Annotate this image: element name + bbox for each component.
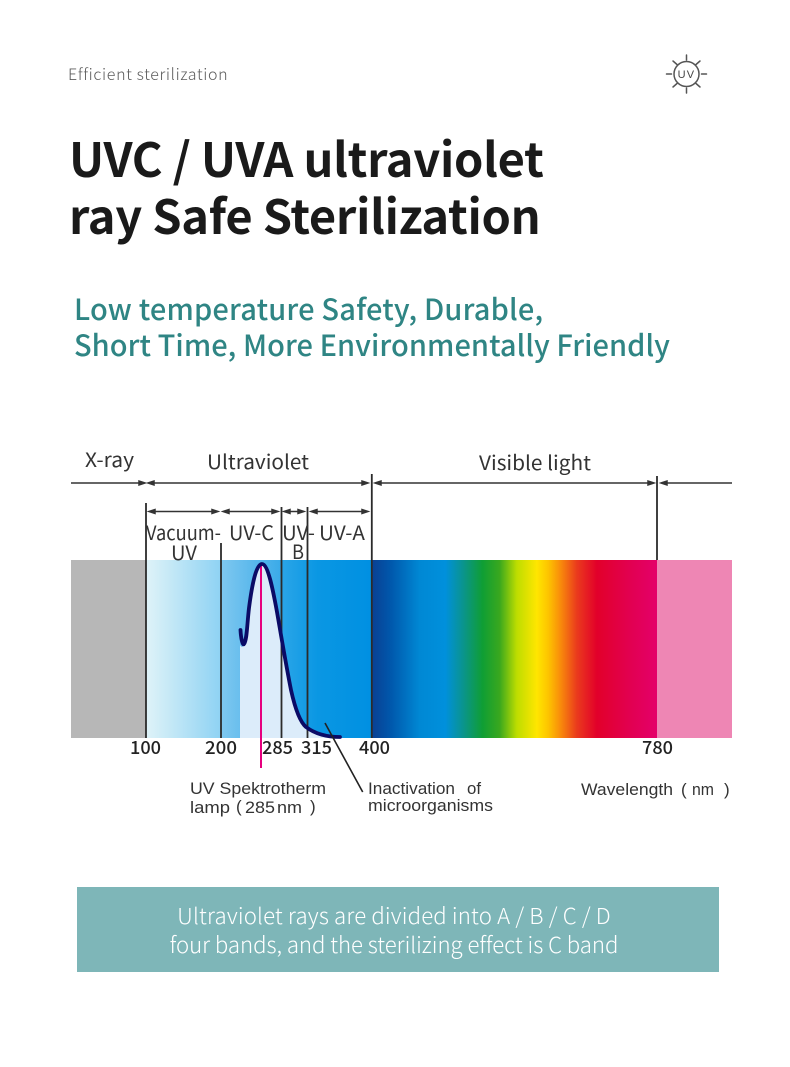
band: visible spectrum [371, 560, 657, 738]
chart labels: annotations: ) [724, 780, 730, 799]
subtitle [74, 287, 670, 365]
sensitivity curve [240, 564, 340, 737]
lamp marker line [260, 563, 262, 768]
chart labels: wavelength ticks: 315 [301, 734, 332, 760]
icon: UV sun [666, 54, 708, 94]
chart labels: regions: B [292, 536, 304, 565]
chart labels: wavelength ticks: 285 [262, 734, 293, 760]
spectrum chart [71, 444, 732, 817]
chart labels: wavelength ticks: 400 [359, 734, 390, 760]
chart labels: regions: UV- [282, 517, 315, 546]
title: ray Safe Sterilization [69, 178, 540, 248]
subtitle: Low temperature Safety, Durable, [74, 287, 543, 329]
chart labels: wavelength ticks [130, 734, 673, 760]
band: infrared pink [657, 560, 732, 738]
callout text: four bands, and the sterilizing effect is C band [170, 928, 618, 960]
band: vacuum UV [146, 560, 221, 738]
title [69, 122, 544, 248]
range arrows [71, 481, 732, 514]
chart labels: annotations: microorganisms [368, 796, 493, 815]
chart labels: annotations: ( [236, 797, 242, 816]
subtitle: Short Time, More Environmentally Friendly [74, 323, 670, 365]
chart labels: wavelength ticks: 100 [130, 734, 161, 760]
chart labels: regions: UV-A [319, 517, 366, 546]
chart labels: regions: UV [171, 537, 197, 566]
chart labels: annotations: ) [310, 797, 316, 816]
chart labels: annotations: 285 [245, 798, 275, 817]
chart labels: annotations: Inactivation [368, 779, 455, 798]
chart labels: annotations: nm [692, 780, 714, 799]
chart labels: annotations: ( [681, 780, 687, 799]
eyebrow label: Efficient sterilization [68, 61, 228, 85]
area under lamp curve [240, 563, 340, 738]
title: UVC / UVA ultraviolet [69, 122, 544, 190]
chart labels: regions: X-ray [85, 444, 135, 473]
band: UV-C [221, 560, 285, 738]
chart labels: regions: UV-C [229, 517, 274, 546]
chart labels: wavelength ticks: 200 [205, 734, 237, 760]
chart labels: annotations: of [467, 779, 481, 798]
band: UV-B and UV-A [282, 560, 371, 738]
boundary lines [146, 474, 657, 738]
chart labels: regions: Vacuum- [146, 517, 221, 546]
band: X-ray grey [71, 560, 146, 738]
chart labels: regions [85, 444, 591, 566]
chart labels: annotations: UV Spektrotherm [190, 779, 326, 798]
chart labels: annotations: nm [277, 798, 302, 817]
chart labels: wavelength ticks: 780 [642, 734, 673, 760]
icon: UV sun: UV [678, 69, 695, 81]
pointer line [325, 723, 363, 792]
chart labels: annotations: Wavelength [581, 780, 673, 799]
chart labels: regions: Ultraviolet [207, 446, 309, 475]
chart labels: annotations [190, 779, 730, 817]
callout banner [77, 887, 719, 972]
chart labels: annotations: lamp [190, 798, 230, 817]
callout text: Ultraviolet rays are divided into A / B / C / D [177, 899, 611, 931]
callout text [170, 899, 618, 960]
chart labels: regions: Visible light [479, 447, 591, 476]
